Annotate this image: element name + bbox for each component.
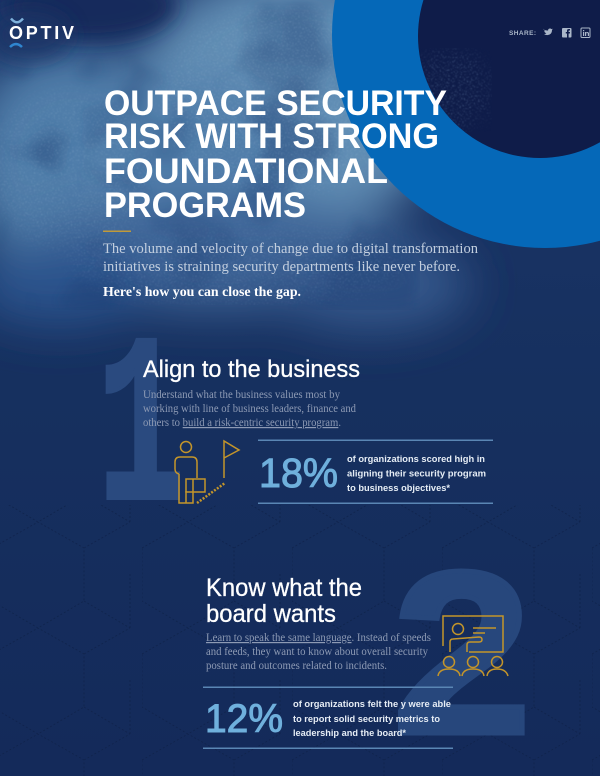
section 2 text bbox=[206, 630, 431, 672]
icon: person with briefcase and flag bbox=[175, 441, 239, 503]
title: PROGRAMS bbox=[104, 185, 306, 225]
intro text: The volume and velocity of change due to digital transformation bbox=[103, 241, 478, 257]
section 2 stat: 12%: 12% bbox=[205, 697, 283, 741]
title: RISK WITH STRONG bbox=[104, 116, 439, 156]
section 1 stat text: to business objectives* bbox=[347, 483, 450, 494]
section 2 stat text: to report solid security metrics to bbox=[293, 714, 440, 725]
title: FOUNDATIONAL bbox=[104, 151, 388, 191]
title: OUTPACE SECURITY bbox=[104, 83, 447, 123]
intro text bbox=[103, 241, 478, 275]
blue ring bbox=[332, 0, 600, 248]
icon: presenter and audience bbox=[438, 616, 508, 676]
section 1 text: others to build a risk-centric security program. bbox=[143, 415, 341, 429]
section 2: know what the board wants bbox=[203, 574, 508, 749]
section 1 stat text bbox=[347, 454, 486, 494]
logo: OPTIV bbox=[9, 23, 74, 43]
section 2 heading: board wants bbox=[206, 600, 336, 628]
section 2 heading bbox=[206, 574, 362, 628]
big number 2: 2 bbox=[392, 524, 532, 776]
section 2 stat text: of organizations felt the y were able bbox=[293, 699, 451, 710]
section 1 stat text: aligning their security program bbox=[347, 468, 486, 480]
section 2 text: and feeds, they want to know about overall security bbox=[206, 644, 428, 658]
section 1 stat text: of organizations scored high in bbox=[347, 454, 485, 465]
section 2 text: posture and outcomes related to incidents. bbox=[206, 658, 387, 672]
section 1 stat: 18%: 18% bbox=[259, 450, 338, 496]
big number 1: 1 bbox=[97, 299, 185, 571]
section 1 stat rules bbox=[258, 440, 493, 504]
section 2 stat rules bbox=[203, 686, 453, 749]
section 1 text: working with line of business leaders, finance and bbox=[143, 401, 356, 415]
section 2 text: Learn to speak the same language. Instead of speeds bbox=[206, 630, 431, 644]
section 2 stat text: leadership and the board* bbox=[293, 728, 406, 739]
section 1 text bbox=[143, 387, 356, 429]
section 1 heading: Align to the business bbox=[143, 356, 360, 383]
share links: SHARE: bbox=[509, 30, 536, 37]
title bbox=[104, 83, 447, 225]
section 2 heading: Know what the bbox=[206, 574, 362, 602]
section 1: align to the business bbox=[143, 356, 493, 504]
gold rule bbox=[103, 230, 131, 232]
section 2 stat text bbox=[293, 699, 451, 739]
intro text: initiatives is straining security departments like never before. bbox=[103, 259, 460, 275]
powder cloud texture bbox=[0, 0, 470, 330]
intro call to action: Here's how you can close the gap. bbox=[103, 285, 301, 300]
section 1 text: Understand what the business values most by bbox=[143, 387, 340, 401]
share links bbox=[509, 28, 590, 38]
